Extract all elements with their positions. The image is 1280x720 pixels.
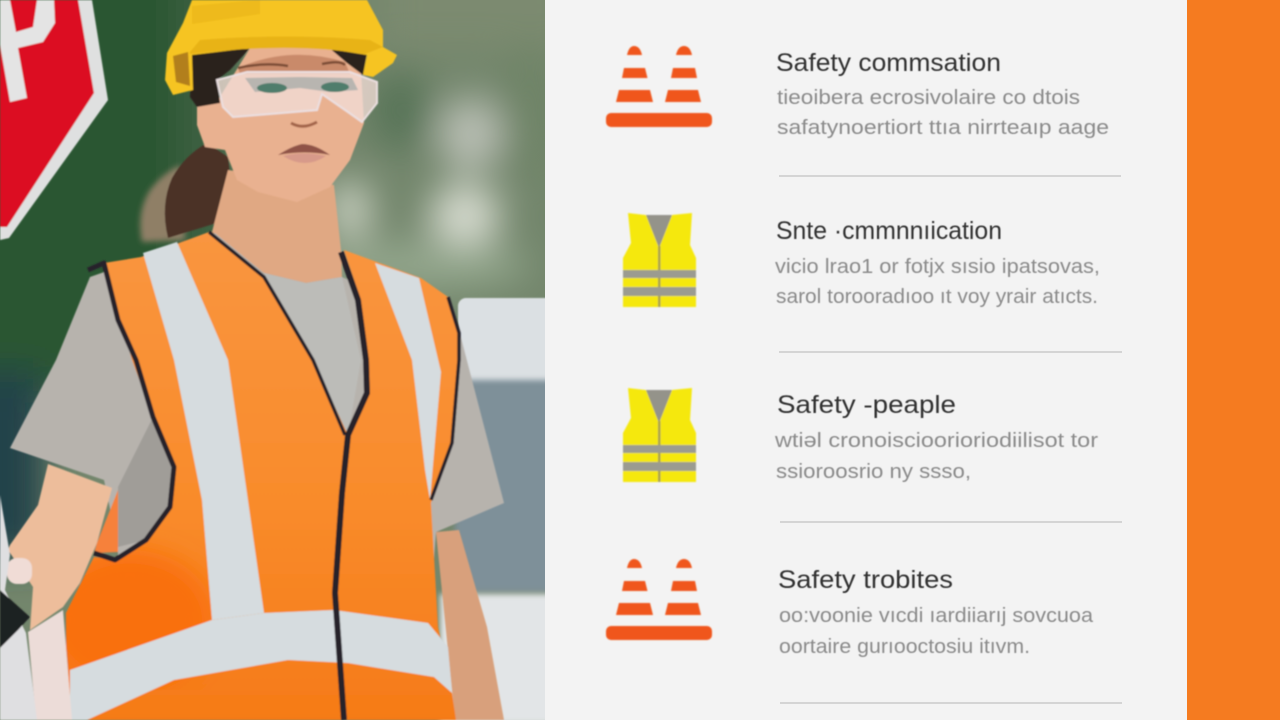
nose and lips [278, 122, 330, 163]
list item 4 heading: Safety trobites [778, 566, 953, 594]
safety glasses [217, 72, 377, 122]
panel: list background [545, 0, 1187, 720]
icon: traffic cones 1 [606, 46, 712, 127]
finger [7, 558, 32, 584]
right arm [436, 530, 504, 720]
neck [212, 170, 342, 283]
list item 3 body: ssioroosrio ny ssso, [776, 461, 971, 483]
photo background: blurred foliage [0, 0, 580, 720]
pale pole section [28, 610, 72, 720]
panel: photo of safety worker [0, 0, 580, 720]
list item 2 body: vicio lrao1 or fotjx sısio ipatsovas, [775, 256, 1100, 278]
list item 1 heading: Safety commsation [776, 49, 1001, 77]
reflective strips [70, 242, 452, 720]
face [197, 46, 364, 202]
list item 2 body: sarol torooradıoo ıt voy yrair atıcts. [776, 286, 1098, 308]
list item 1 body: safatynoertiort ttıa nirrteaıp aage [777, 117, 1109, 139]
list item 2 heading: Snte ·cmmnnıication [776, 217, 1002, 245]
stop sign [0, 0, 108, 240]
left arm [8, 464, 112, 630]
safety vest [45, 232, 459, 720]
forehead shade [238, 55, 350, 74]
list item 3 body: wtiəl cronoiscioorioriodiilisot tor [774, 430, 1098, 452]
list item 1 body: tieoibera ecrosivolaire co dtois [777, 87, 1080, 109]
list item 3 heading: Safety -peaple [777, 391, 956, 419]
panel: orange side bar [1187, 0, 1280, 720]
black glove [0, 590, 30, 648]
worker [0, 0, 504, 720]
list item 4 body: oo:voonie vıcdi ıardiiarıj sovcuoa [779, 605, 1094, 627]
icon: high-visibility vest 2 [623, 388, 696, 482]
grey t-shirt [10, 232, 504, 558]
black piping [88, 263, 174, 560]
hair under helmet [190, 46, 367, 107]
icon: traffic cones 2 [606, 559, 712, 640]
eyebrows [238, 62, 345, 68]
hard hat [165, 0, 397, 95]
white pole [0, 495, 37, 720]
icon: high-visibility vest 1 [623, 213, 696, 307]
car behind worker [440, 298, 558, 720]
list item 4 body: oortaire gurıooctosiu itıvm. [779, 636, 1030, 658]
ponytail [140, 143, 232, 242]
